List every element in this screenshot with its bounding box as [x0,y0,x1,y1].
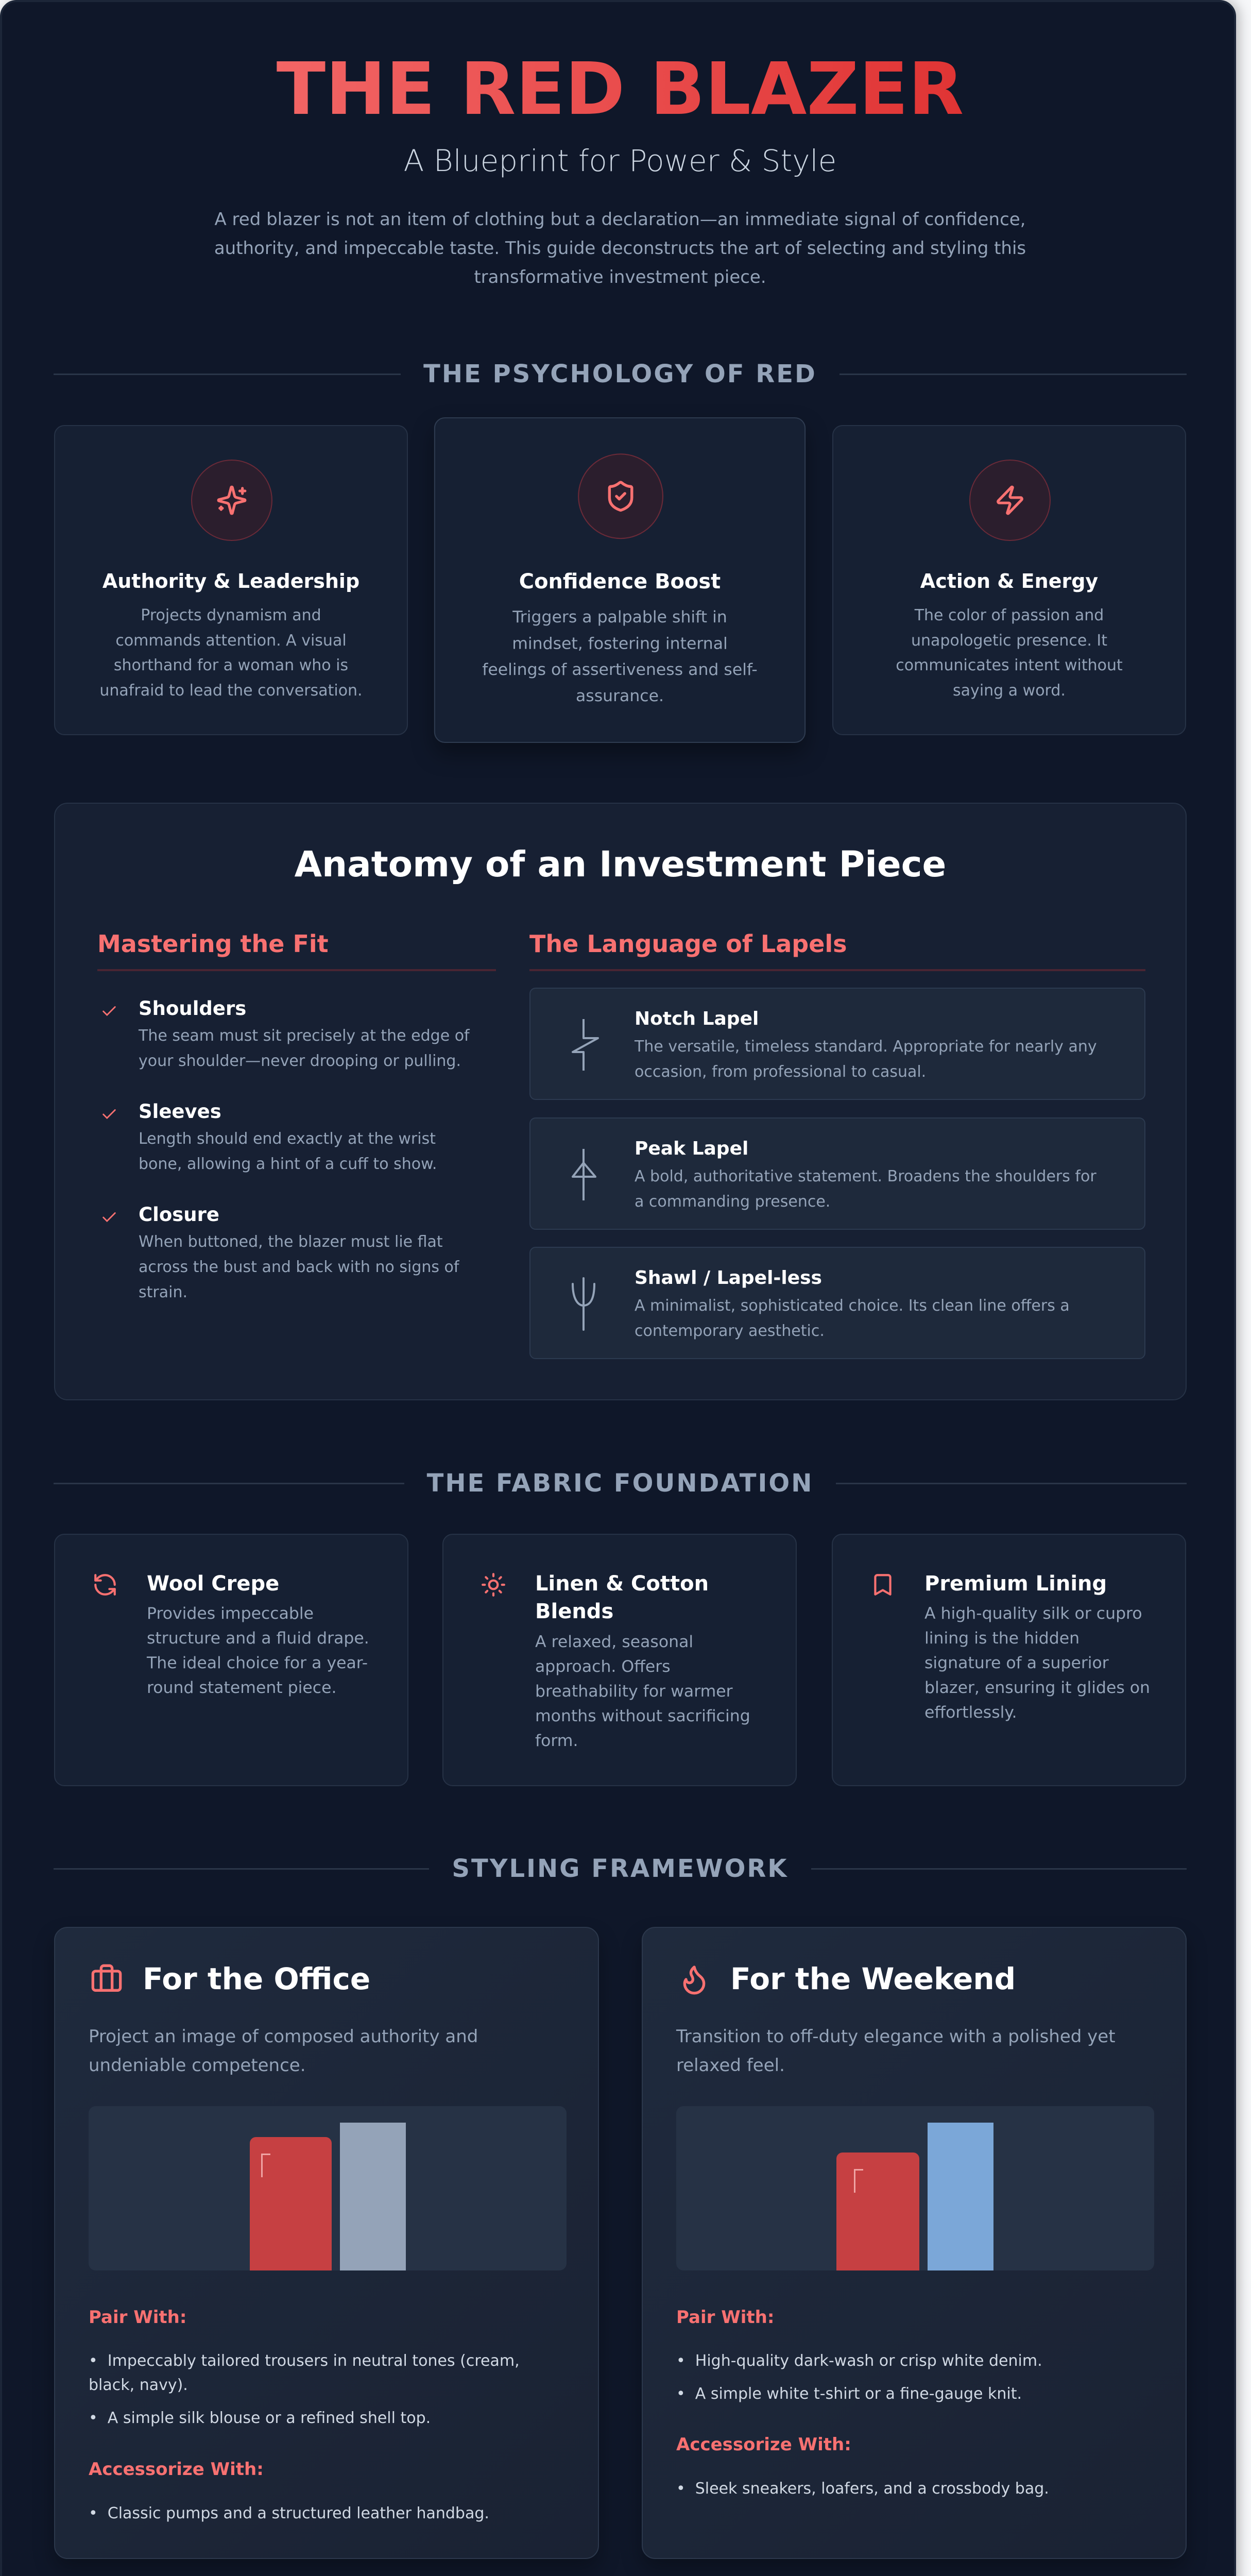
text: shorthand for a woman who is [114,656,348,674]
icon: shield check [578,453,663,539]
card: authority & leadership [54,425,408,735]
intro paragraph: authority, and impeccable taste. This guide deconstructs the art of selecting and styling this [214,238,1026,259]
lapel card: shawl: A minimalist, sophisticated choice. Its clean line offers a [635,1297,1070,1315]
fit item: sleeves: bone, allowing a hint of a cuff to show. [139,1155,437,1173]
panel: anatomy: Closure [139,1204,219,1226]
fabric card: linen & cotton: form. [535,1732,578,1750]
fit item: closure: strain. [139,1283,187,1301]
icon: refresh [94,1574,116,1596]
section heading: styling framework [54,1854,1187,1883]
fabric card: linen & cotton: months without sacrificing [535,1707,750,1725]
fabric card: wool crepe: round statement piece. [147,1679,337,1697]
panel: anatomy: Sleeves [139,1100,221,1123]
text [99,606,363,700]
fit item: closure [102,1204,459,1301]
icon: sun [482,1573,505,1597]
text: assurance. [576,686,664,705]
card: confidence boost [434,417,806,743]
section heading: fabric foundation: THE FABRIC FOUNDATION [427,1469,813,1498]
fabric card: premium lining [832,1534,1186,1786]
heading: language of lapels [529,929,1145,971]
intro paragraph [214,209,1026,287]
heading: Authority & Leadership [102,570,359,592]
styling card: office: For the Office [143,1961,370,1996]
styling card: office: • A simple silk blouse or a refined shell top. [89,2409,431,2427]
title: THE RED BLAZER [277,47,964,131]
fabric card: linen & cotton: Blends [535,1600,613,1623]
text: commands attention. A visual [115,632,347,649]
fabric card: wool crepe: Provides impeccable [147,1604,314,1623]
lapel card: peak: A bold, authoritative statement. Broadens the shoulders for [635,1167,1096,1185]
fabric card: linen & cotton: approach. Offers [535,1657,671,1676]
section heading: psychology of red: THE PSYCHOLOGY OF RED [423,360,817,388]
lapel card: shawl [529,1247,1145,1359]
fabric card: premium lining: signature of a superior [924,1654,1109,1672]
styling card: weekend: Pair With: [676,2307,774,2328]
styling card: weekend: • Sleek sneakers, loafers, and a crossbody bag. [676,2480,1049,2498]
icon: briefcase [92,1964,122,1992]
lapel card: notch [529,988,1145,1100]
fabric card: premium lining: lining is the hidden [924,1629,1079,1648]
heading: Confidence Boost [519,569,721,593]
icon: flame [683,1965,706,1995]
text [896,606,1123,700]
text: mindset, fostering internal [512,634,728,653]
section heading: styling framework: STYLING FRAMEWORK [452,1854,789,1883]
section heading: fabric foundation [54,1469,1187,1498]
icon: peak lapel [572,1149,596,1200]
styling card: weekend: • A simple white t-shirt or a fine-gauge knit. [676,2385,1022,2403]
styling card: office: • Classic pumps and a structured leather handbag. [89,2504,489,2522]
heading: language of lapels: The Language of Lapels [529,930,847,958]
subtitle: A Blueprint for Power & Style [404,143,836,178]
fabric card: linen & cotton: breathability for warmer [535,1682,733,1701]
heading: mastering the fit [97,929,496,971]
text: Projects dynamism and [141,606,321,624]
fabric card: wool crepe: The ideal choice for a year- [147,1654,368,1672]
icon: shawl lapel [572,1277,595,1331]
fabric card: linen & cotton: A relaxed, seasonal [535,1633,693,1651]
text: unafraid to lead the conversation. [99,681,363,700]
card: action & energy [832,425,1186,735]
fit item: closure: across the bust and back with no signs of [139,1258,459,1276]
fit item: sleeves: Length should end exactly at the wrist [139,1130,436,1148]
lapel card: peak: Peak Lapel [635,1138,748,1159]
panel: anatomy [54,803,1187,1400]
fabric card: premium lining: A high-quality silk or cupro [924,1604,1142,1623]
styling card: office: undeniable competence. [89,2055,306,2076]
icon: sparkles [191,460,272,541]
styling card: office: Project an image of composed authority and [89,2026,478,2047]
illustration: weekend outfit [676,2106,1154,2270]
panel title: Anatomy of an Investment Piece [295,844,946,885]
lapel card: notch: Notch Lapel [635,1008,759,1029]
text: The color of passion and [915,606,1104,624]
styling card: office: Accessorize With: [89,2459,264,2480]
fabric card: wool crepe: structure and a fluid drape. [147,1629,369,1648]
text: feelings of assertiveness and self- [482,660,758,679]
lapel card: shawl: contemporary aesthetic. [635,1322,825,1340]
styling card: office: Pair With: [89,2307,186,2328]
fabric card: wool crepe: Wool Crepe [147,1572,279,1596]
fabric card: linen & cotton [442,1534,797,1786]
styling card: weekend: Accessorize With: [676,2434,851,2455]
fit item: closure: When buttoned, the blazer must lie flat [139,1233,443,1251]
fabric card: premium lining: effortlessly. [924,1703,1017,1722]
lapel card: shawl: Shawl / Lapel-less [635,1267,822,1289]
text: Triggers a palpable shift in [512,608,727,626]
fit item: shoulders: your shoulder—never drooping or pulling. [139,1052,461,1070]
text [482,608,758,705]
heading: Action & Energy [920,570,1098,592]
fabric card: wool crepe [54,1534,408,1786]
intro paragraph: A red blazer is not an item of clothing but a declaration—an immediate signal of confidence, [214,209,1026,230]
styling card: office [54,1927,599,2559]
styling card: weekend: • High-quality dark-wash or crisp white denim. [676,2352,1042,2370]
fit item: shoulders [102,997,470,1070]
fit item: shoulders: The seam must sit precisely at the edge of [139,1027,470,1045]
fabric card: linen & cotton: Linen & Cotton [535,1572,709,1596]
heading: mastering the fit: Mastering the Fit [97,930,329,958]
styling card: office: black, navy). [89,2376,188,2394]
text: unapologetic presence. It [911,632,1107,649]
illustration: office outfit [89,2106,567,2270]
lapel card: notch: The versatile, timeless standard. Appropriate for nearly any [635,1038,1097,1056]
icon: zap [969,460,1051,541]
styling card: office: • Impeccably tailored trousers in neutral tones (cream, [89,2352,520,2370]
styling card: weekend [642,1927,1187,2559]
text: communicates intent without [896,656,1123,674]
styling card: weekend: Transition to off-duty elegance with a polished yet [676,2026,1116,2047]
panel: anatomy: Shoulders [139,997,246,1020]
styling card: weekend: For the Weekend [730,1961,1016,1996]
text: saying a word. [953,681,1066,700]
lapel card: notch: occasion, from professional to casual. [635,1063,926,1081]
lapel card: peak [529,1117,1145,1230]
styling card: weekend: relaxed feel. [676,2055,785,2076]
lapel card: peak: a commanding presence. [635,1193,830,1211]
intro paragraph: transformative investment piece. [474,267,766,287]
fabric card: premium lining: Premium Lining [924,1572,1107,1596]
icon: bookmark [874,1574,892,1596]
fit item: sleeves [102,1100,437,1173]
icon: notch lapel [572,1019,599,1071]
fabric card: premium lining: blazer, ensuring it glides on [924,1679,1150,1697]
section heading: psychology of red [54,360,1187,388]
